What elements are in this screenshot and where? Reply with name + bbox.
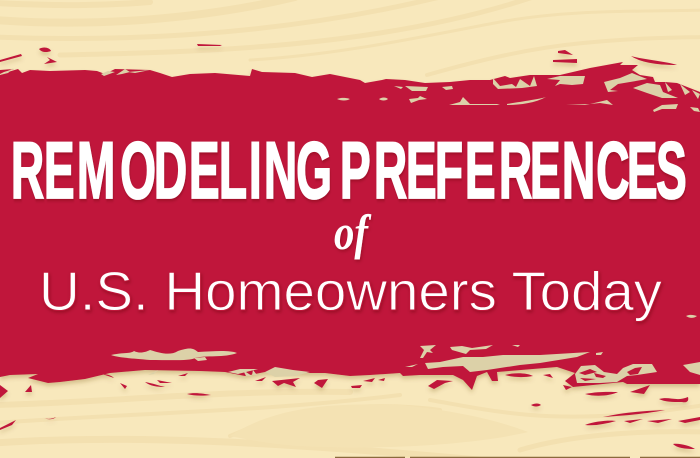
connector word: of: of: [334, 204, 372, 260]
subtitle: U.S. Homeowners Today: U.S. Homeowners Today: [39, 260, 663, 322]
stray chip at right edge: [686, 315, 697, 318]
paint chips: cream holes in band: [0, 68, 700, 383]
title: Remodeling Preferences: PREFERENCES: [340, 124, 687, 215]
red spots inside chips: [579, 367, 642, 381]
title: Remodeling Preferences: [11, 124, 687, 215]
title: Remodeling Preferences: REMODELING: [11, 124, 332, 215]
bottom edge strip: [335, 456, 700, 458]
